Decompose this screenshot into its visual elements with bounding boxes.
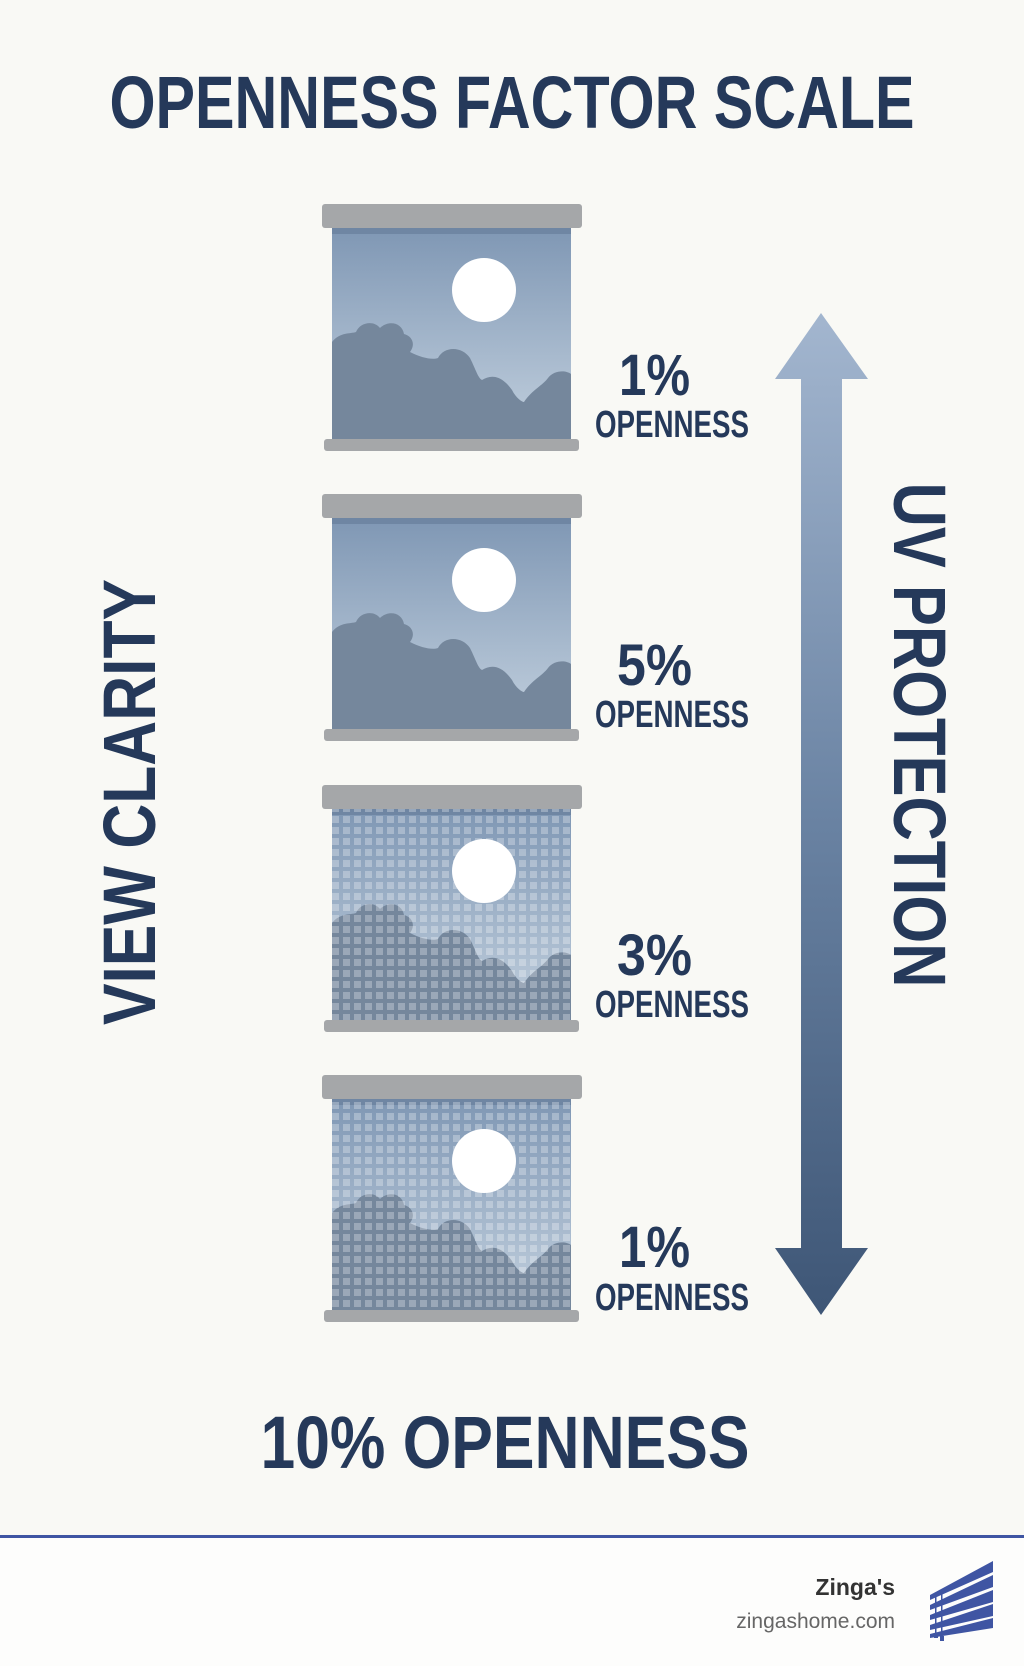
footer brand text: zingashome.com bbox=[736, 1610, 895, 1633]
footer brand text bbox=[736, 1574, 895, 1633]
view clarity label: VIEW CLARITY bbox=[88, 579, 171, 1025]
label 2: 5% bbox=[617, 633, 692, 698]
label 3: 3% bbox=[617, 923, 692, 988]
label 3: OPENNESS bbox=[595, 984, 749, 1026]
window 2 bbox=[322, 494, 582, 741]
footer brand text: Zinga's bbox=[815, 1574, 895, 1600]
label 4 bbox=[595, 1215, 749, 1319]
arrow: double-headed bbox=[775, 313, 868, 1315]
label 2: OPENNESS bbox=[595, 694, 749, 736]
label 1: OPENNESS bbox=[595, 404, 749, 446]
label 1 bbox=[595, 343, 749, 446]
logo: blinds bbox=[930, 1561, 993, 1641]
window 3 bbox=[322, 785, 582, 1032]
label 2 bbox=[595, 633, 749, 736]
label 1: 1% bbox=[619, 343, 690, 408]
label 3 bbox=[595, 923, 749, 1026]
window 1 bbox=[322, 204, 582, 451]
bottom caption: 10% OPENNESS bbox=[260, 1401, 750, 1484]
label 4: OPENNESS bbox=[595, 1277, 749, 1319]
window 4 bbox=[322, 1075, 582, 1322]
UV protection label: UV PROTECTION bbox=[878, 482, 961, 988]
label 4: 1% bbox=[619, 1215, 690, 1280]
